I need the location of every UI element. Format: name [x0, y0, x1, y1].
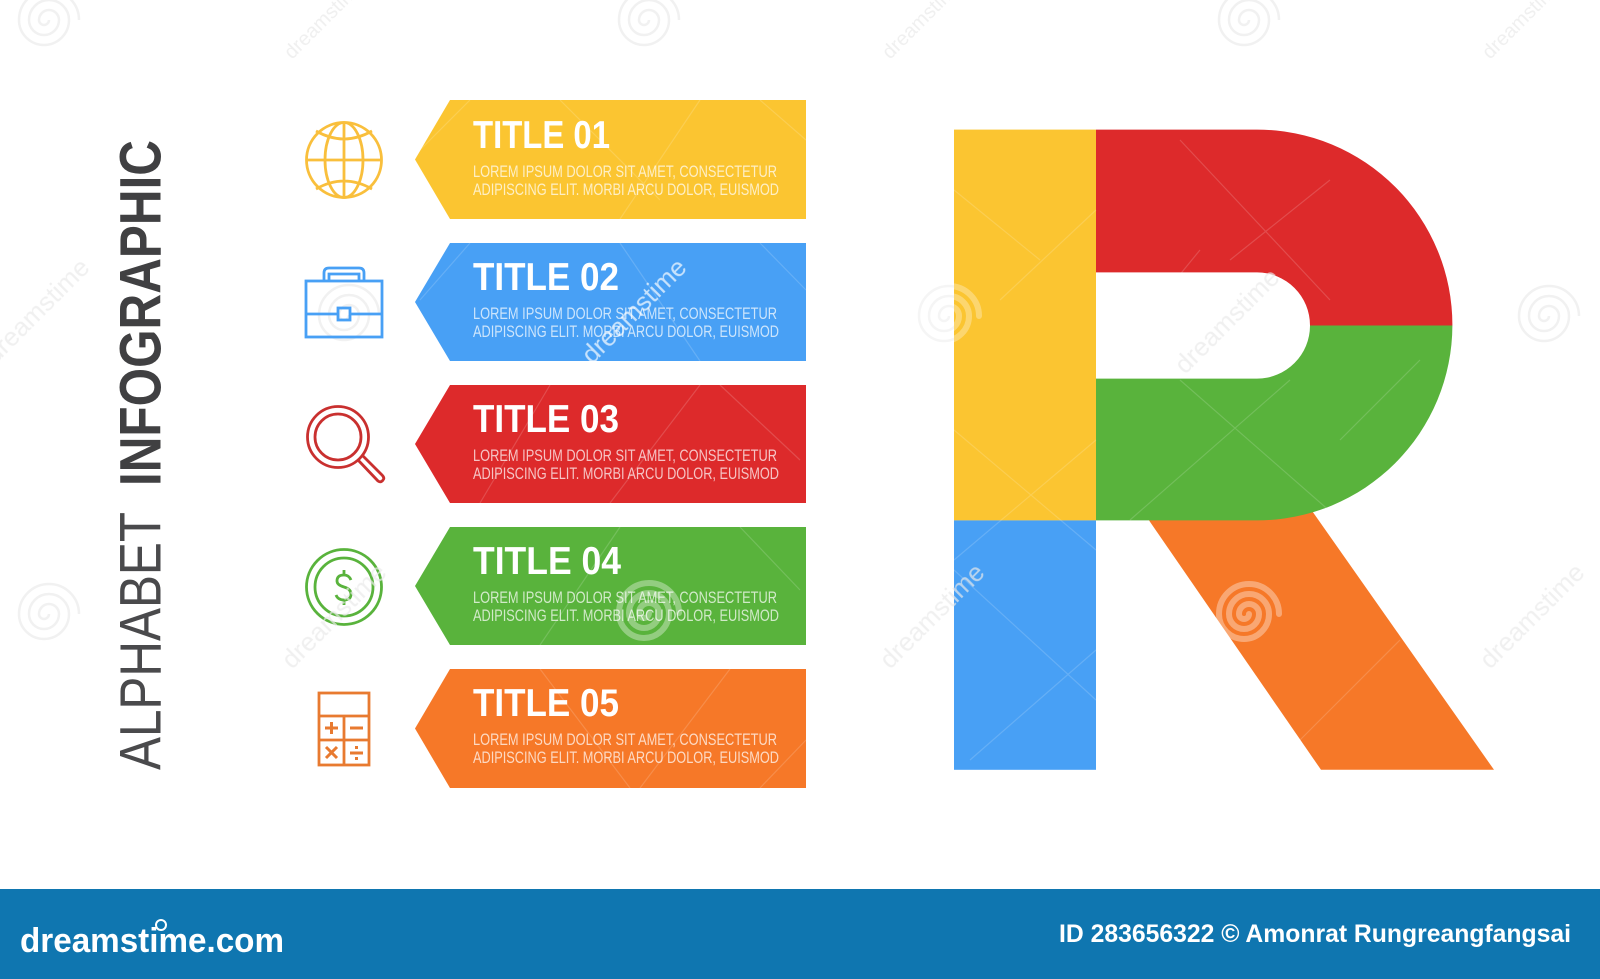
text: body 03: LOREM IPSUM DOLOR SIT AMET, CONSECTETUR — [473, 447, 777, 465]
text: body 03: ADIPISCING ELIT. MORBI ARCU DOLOR, EUISMOD — [473, 465, 779, 483]
icon: globe — [306, 122, 382, 198]
banner: title 02 — [415, 243, 806, 361]
letter R — [954, 130, 1494, 770]
R: orange leg — [1149, 500, 1494, 770]
text: body 04: ADIPISCING ELIT. MORBI ARCU DOLOR, EUISMOD — [473, 607, 779, 625]
R: blue stem foot — [954, 520, 1096, 770]
text: body 05: LOREM IPSUM DOLOR SIT AMET, CONSECTETUR — [473, 731, 777, 749]
R: red bowl top — [1096, 130, 1452, 326]
text: body 05: ADIPISCING ELIT. MORBI ARCU DOLOR, EUISMOD — [473, 749, 779, 767]
watermark text — [0, 0, 1590, 674]
heading: title 01: TITLE 01 — [473, 114, 610, 157]
vertical title: INFOGRAPHIC — [108, 140, 174, 486]
text: body 04: LOREM IPSUM DOLOR SIT AMET, CONSECTETUR — [473, 589, 777, 607]
watermark text: dreamstime — [1168, 262, 1285, 379]
banner: title 01 — [415, 100, 806, 219]
text: body 01: ADIPISCING ELIT. MORBI ARCU DOLOR, EUISMOD — [473, 181, 779, 199]
text: body 01: LOREM IPSUM DOLOR SIT AMET, CONSECTETUR — [473, 163, 777, 181]
watermark swirls — [619, 286, 1279, 639]
watermark text: dreamstime — [575, 252, 692, 369]
icon: magnifier — [308, 406, 384, 482]
footer band — [0, 889, 1600, 979]
footer logo: dreamstime.com — [20, 922, 284, 960]
heading: title 02: TITLE 02 — [473, 256, 619, 299]
text: body 02: ADIPISCING ELIT. MORBI ARCU DOLOR, EUISMOD — [473, 323, 779, 341]
icon: calculator — [319, 693, 369, 765]
text: body 02: LOREM IPSUM DOLOR SIT AMET, CONSECTETUR — [473, 305, 777, 323]
vertical title — [108, 140, 174, 770]
vertical title: ALPHABET — [108, 512, 174, 770]
banner: title 05 — [415, 669, 806, 788]
banner: title 04 — [415, 527, 806, 645]
footer credit: ID 283656322 © Amonrat Rungreangfangsai — [1059, 920, 1571, 948]
banner: title 03 — [415, 385, 806, 503]
R: yellow stem — [954, 130, 1096, 520]
heading: title 04: TITLE 04 — [473, 540, 622, 583]
watermark text: dreamstime — [873, 557, 990, 674]
R: green bowl bottom — [1096, 326, 1452, 520]
watermark text: dreamstime — [1473, 557, 1590, 674]
heading: title 05: TITLE 05 — [473, 682, 619, 725]
icon: dollar coin — [306, 550, 382, 624]
heading: title 03: TITLE 03 — [473, 398, 619, 441]
icon: briefcase — [306, 268, 382, 337]
watermark text: dreamstime — [275, 557, 392, 674]
